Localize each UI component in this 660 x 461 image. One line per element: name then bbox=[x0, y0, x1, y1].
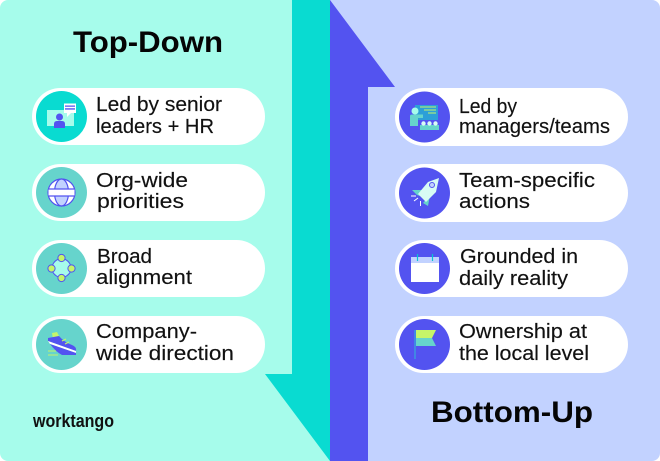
heading: Top-Down: Top-Down bbox=[73, 26, 223, 59]
item: team-specific actions: actions bbox=[459, 191, 530, 213]
item: ownership at the local level: Ownership at bbox=[459, 321, 587, 343]
heading: Bottom-Up: Bottom-Up bbox=[431, 396, 593, 429]
item: led by senior leaders: leaders + HR bbox=[96, 116, 214, 138]
item: led by managers: Led by bbox=[459, 96, 517, 118]
icon: connected nodes bbox=[48, 254, 75, 282]
icon: globe bbox=[48, 179, 75, 206]
item: team-specific actions bbox=[395, 164, 628, 222]
item: grounded in daily reality: daily reality bbox=[459, 268, 568, 290]
panel: bottom-up background bbox=[330, 0, 660, 461]
panel: top-down items bbox=[32, 26, 265, 431]
item: broad alignment: alignment bbox=[96, 267, 192, 289]
item: ownership at the local level: the local level bbox=[459, 343, 589, 365]
item: org-wide priorities: priorities bbox=[97, 191, 184, 213]
item: led by senior leaders: Led by senior bbox=[96, 94, 222, 116]
item: ownership at the local level bbox=[395, 316, 628, 373]
icon: teacher with audience bbox=[410, 105, 439, 130]
item: led by senior leaders bbox=[32, 88, 265, 145]
item: grounded in daily reality: Grounded in bbox=[460, 246, 578, 268]
item: led by managers bbox=[395, 88, 628, 146]
item: grounded in daily reality bbox=[395, 240, 628, 297]
item: led by managers: managers/teams bbox=[459, 116, 610, 138]
item: org-wide priorities: Org-wide bbox=[96, 170, 188, 192]
icon: presenter with speech bubble bbox=[47, 104, 76, 128]
item: broad alignment bbox=[32, 240, 265, 297]
panel: bottom-up items bbox=[395, 88, 628, 429]
item: team-specific actions: Team-specific bbox=[459, 170, 595, 192]
icon: flag bbox=[414, 330, 436, 359]
panel: top-down background bbox=[0, 0, 330, 461]
icon: rocket bbox=[411, 178, 439, 206]
icon: running shoe bbox=[48, 332, 76, 355]
arrow: downward teal bbox=[265, 0, 330, 461]
arrow: upward blue bbox=[330, 0, 395, 461]
item: company-wide direction: wide direction bbox=[95, 343, 234, 365]
item: broad alignment: Broad bbox=[97, 246, 152, 268]
item: company-wide direction: Company- bbox=[96, 321, 197, 343]
logo: worktango: worktango bbox=[32, 411, 114, 431]
item: company-wide direction bbox=[32, 316, 265, 373]
icon: calendar bbox=[411, 254, 439, 282]
item: org-wide priorities bbox=[32, 164, 265, 221]
